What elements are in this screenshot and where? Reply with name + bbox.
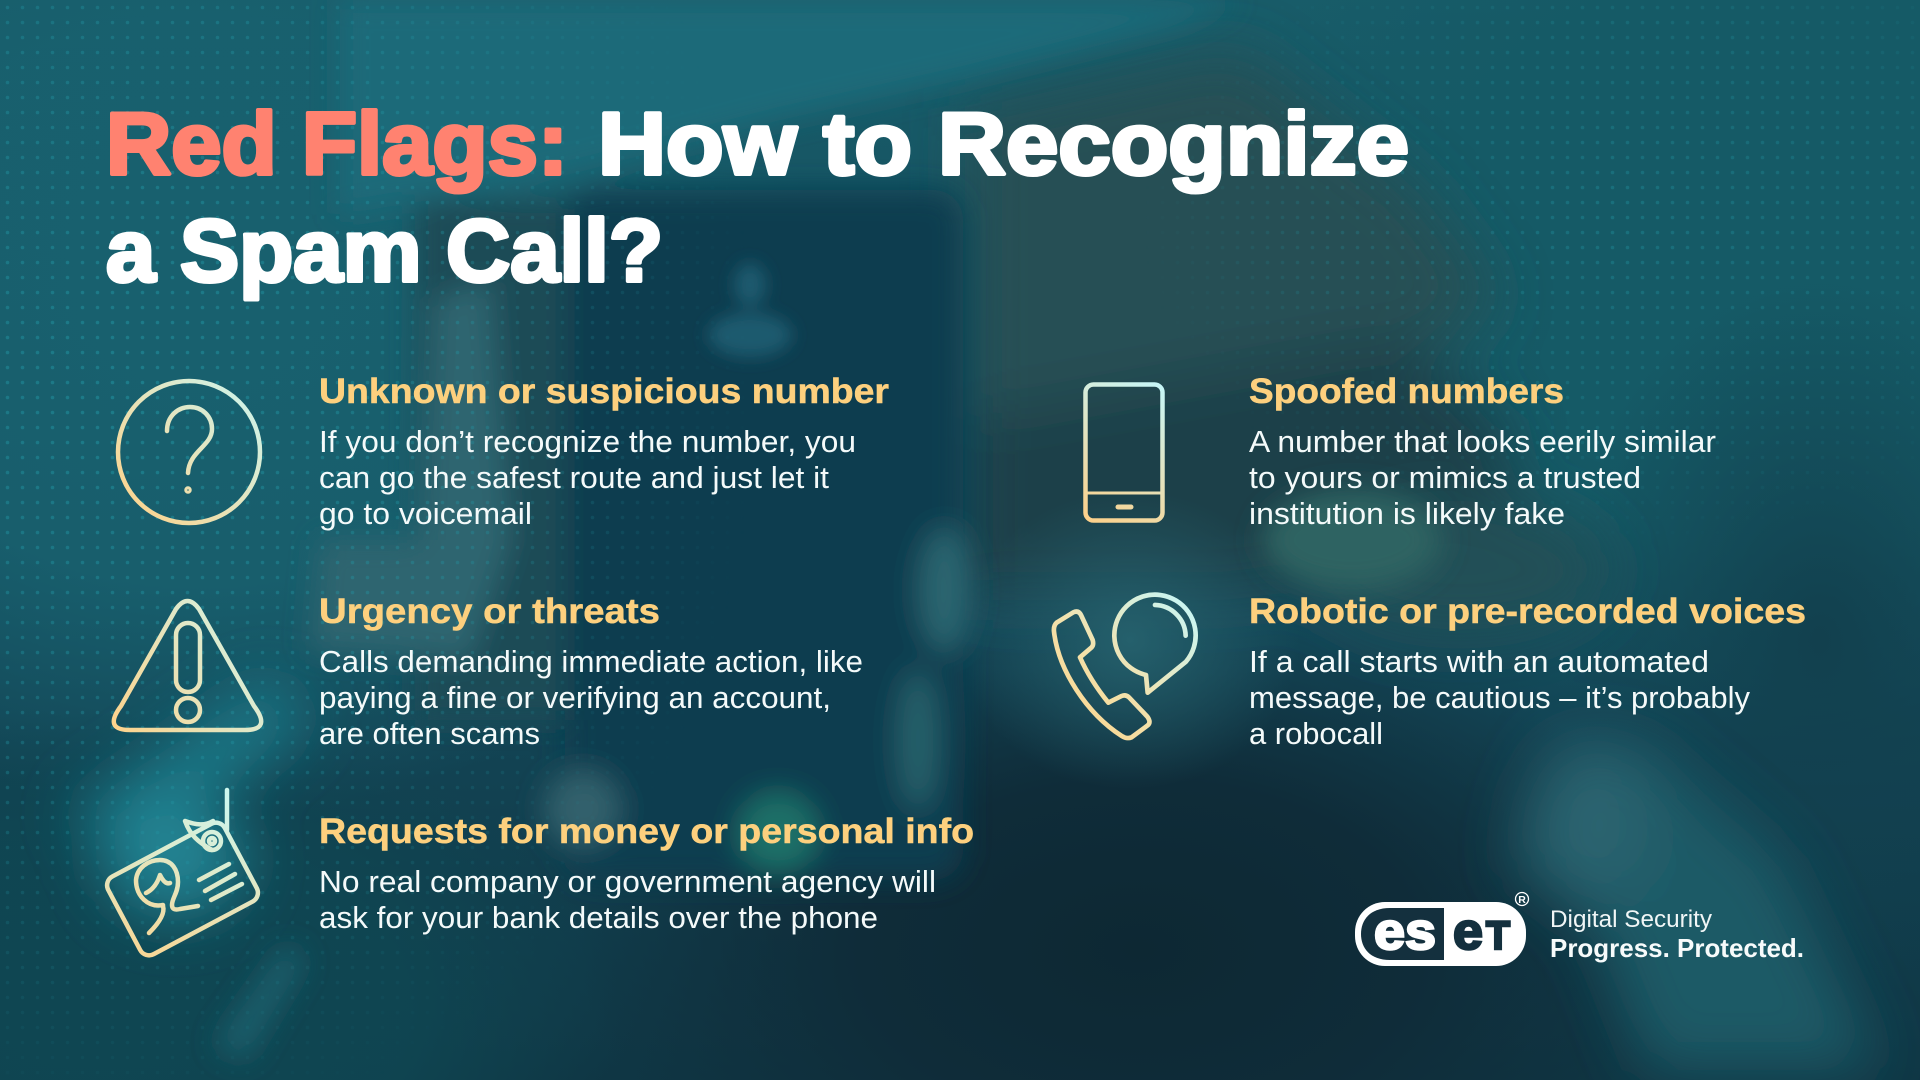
ESET logo: R (1518, 894, 1526, 906)
icon: question mark in circle (118, 381, 260, 523)
title: Red Flags: (106, 94, 568, 193)
ESET logo: T (1486, 914, 1510, 958)
text block: institution is likely fake (1249, 496, 1565, 531)
text block: to yours or mimics a trusted (1249, 460, 1641, 495)
title (106, 94, 1409, 300)
tagline (1550, 906, 1804, 963)
title: How to Recognize (598, 94, 1409, 193)
text block: If a call starts with an automated (1249, 644, 1709, 679)
text block: No real company or government agency will (319, 864, 936, 899)
text block: Calls demanding immediate action, like (319, 644, 863, 679)
heading: Requests for money or personal info (319, 812, 974, 851)
icon: smartphone (1086, 384, 1162, 520)
icon: telephone handset with speech bubble (1054, 595, 1196, 738)
text block (1249, 644, 1750, 751)
ESET logo: es (1374, 903, 1436, 961)
panel: robotic or pre-recorded voices (1054, 592, 1806, 751)
panel: unknown or suspicious number (118, 372, 889, 531)
ESET logo: e (1453, 903, 1483, 961)
text block (319, 864, 936, 935)
panel: urgency or threats (114, 592, 863, 751)
heading: Unknown or suspicious number (319, 372, 889, 411)
text block: ask for your bank details over the phone (319, 900, 878, 935)
title: a Spam Call? (106, 201, 663, 300)
tagline: Progress. Protected. (1550, 933, 1804, 963)
heading: Urgency or threats (319, 592, 660, 631)
text block (1249, 424, 1716, 531)
panel: spoofed numbers (1086, 372, 1716, 531)
text block: If you don’t recognize the number, you (319, 424, 856, 459)
heading: Spoofed numbers (1249, 372, 1564, 411)
panel: requests for money or personal info (104, 790, 974, 959)
text block: a robocall (1249, 716, 1383, 751)
ESET logo (1355, 892, 1528, 966)
tagline: Digital Security (1550, 906, 1712, 933)
text block (319, 424, 856, 531)
text block: A number that looks eerily similar (1249, 424, 1716, 459)
text block (319, 644, 863, 751)
icon: ID card on a hook (104, 790, 261, 959)
text block: are often scams (319, 716, 540, 751)
text block: can go the safest route and just let it (319, 460, 829, 495)
text block: paying a fine or verifying an account, (319, 680, 831, 715)
heading: Robotic or pre-recorded voices (1249, 592, 1806, 631)
icon: warning triangle (114, 601, 261, 730)
text block: message, be cautious – it’s probably (1249, 680, 1750, 715)
text block: go to voicemail (319, 496, 532, 531)
